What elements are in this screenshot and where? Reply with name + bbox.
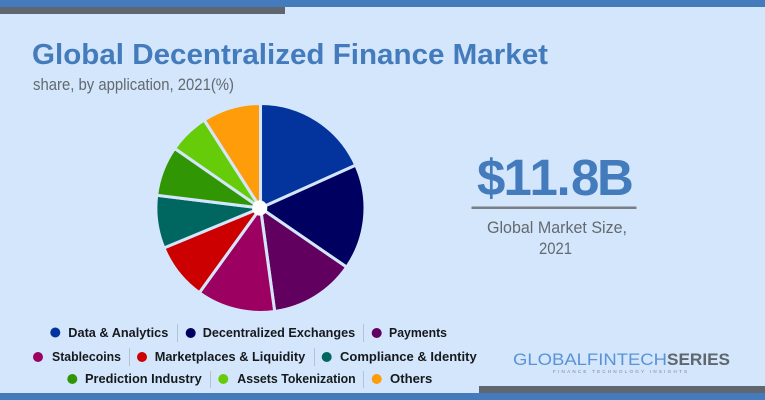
legend: Decentralized Exchanges: Decentralized Exchanges: [203, 325, 355, 340]
market size value: $11.8B: [477, 149, 634, 206]
top header bar: [0, 0, 765, 14]
legend: Data & Analytics: Data & Analytics: [68, 325, 168, 340]
legend: Assets Tokenization: Assets Tokenization: [237, 371, 356, 386]
legend: Payments: Payments: [389, 325, 447, 340]
brand logo: [513, 350, 730, 374]
market size label: [487, 218, 627, 258]
legend: Marketplaces & Liquidity: Marketplaces & Liquidity: [155, 349, 306, 364]
legend: Others: [372, 371, 432, 386]
legend: [33, 324, 477, 388]
legend: Stablecoins: Stablecoins: [52, 349, 121, 364]
legend: Others: Others: [390, 371, 432, 386]
brand logo: GLOBALFINTECH: [513, 350, 667, 369]
pie chart: [156, 103, 365, 313]
title: Global Decentralized Finance Market: [32, 39, 548, 71]
subtitle: share, by application, 2021(%): [33, 75, 234, 94]
market size label: 2021: [539, 239, 572, 258]
legend: Prediction Industry: Prediction Industry: [85, 371, 202, 386]
bottom footer bar: [0, 386, 765, 400]
legend: Compliance & Identity: Compliance & Identity: [340, 349, 477, 364]
brand logo: SERIES: [667, 350, 730, 369]
market size divider: [472, 206, 636, 209]
brand logo: FINANCE TECHNOLOGY INSIGHTS: [553, 369, 687, 374]
market size label: Global Market Size,: [487, 218, 627, 237]
